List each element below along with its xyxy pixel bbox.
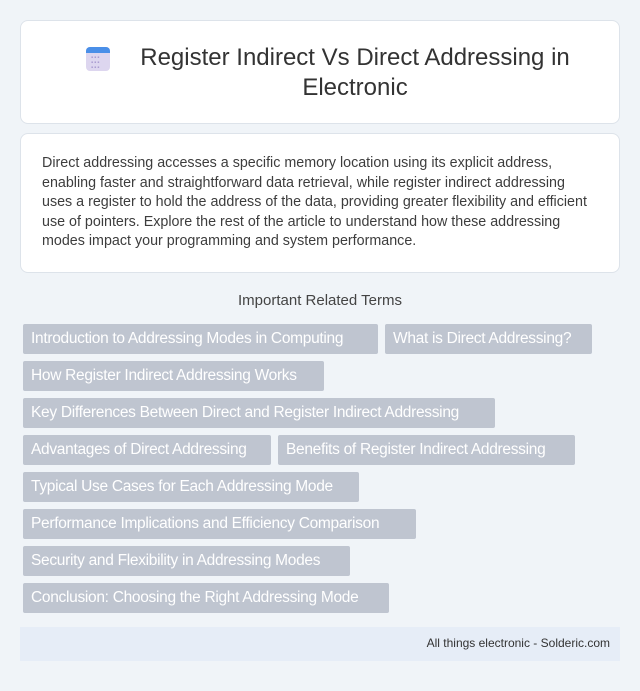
tag (23, 509, 416, 539)
footer (20, 627, 620, 661)
tag: Performance Implications and Efficiency Comparison (31, 515, 379, 532)
tag: What is Direct Addressing? (393, 330, 571, 347)
tag: Conclusion: Choosing the Right Addressing Mode (31, 589, 358, 606)
tag (23, 583, 389, 613)
tag (23, 324, 378, 354)
tag: Introduction to Addressing Modes in Computing (31, 330, 343, 347)
tag (23, 472, 359, 502)
tag (23, 546, 350, 576)
footer text: All things electronic - Solderic.com (427, 636, 610, 650)
icon: calendar: ▪▪▪ (91, 55, 100, 61)
tag: Typical Use Cases for Each Addressing Mode (31, 478, 333, 495)
tag (385, 324, 592, 354)
tag (23, 361, 324, 391)
tag: Advantages of Direct Addressing (31, 441, 247, 458)
tag: Key Differences Between Direct and Register Indirect Addressing (31, 404, 459, 421)
tag: How Register Indirect Addressing Works (31, 367, 297, 384)
tag: Security and Flexibility in Addressing Modes (31, 552, 320, 569)
icon: calendar (86, 47, 110, 71)
icon: calendar: ▪▪▪ (91, 60, 100, 66)
description card (20, 133, 620, 273)
description text: Direct addressing accesses a specific memory location using its explicit address, (42, 155, 552, 171)
title: Register Indirect Vs Direct Addressing in Electronic (140, 44, 570, 101)
tag (278, 435, 575, 465)
description text: modes impact your programming and system performance. (42, 233, 416, 249)
description text: enabling faster and straightforward data retrieval, while register indirect addressing (42, 174, 565, 190)
header card (20, 20, 620, 124)
tag (23, 398, 495, 428)
description text (42, 155, 587, 249)
description text: uses a register to hold the address of the data, providing greater flexibility and efficient (42, 194, 587, 210)
section heading: Important Related Terms (238, 292, 402, 309)
icon: calendar: ▪▪▪ (91, 65, 100, 71)
tag (23, 435, 271, 465)
description text: use of pointers. Explore the rest of the article to understand how these addressing (42, 214, 560, 230)
tag: Benefits of Register Indirect Addressing (286, 441, 545, 458)
